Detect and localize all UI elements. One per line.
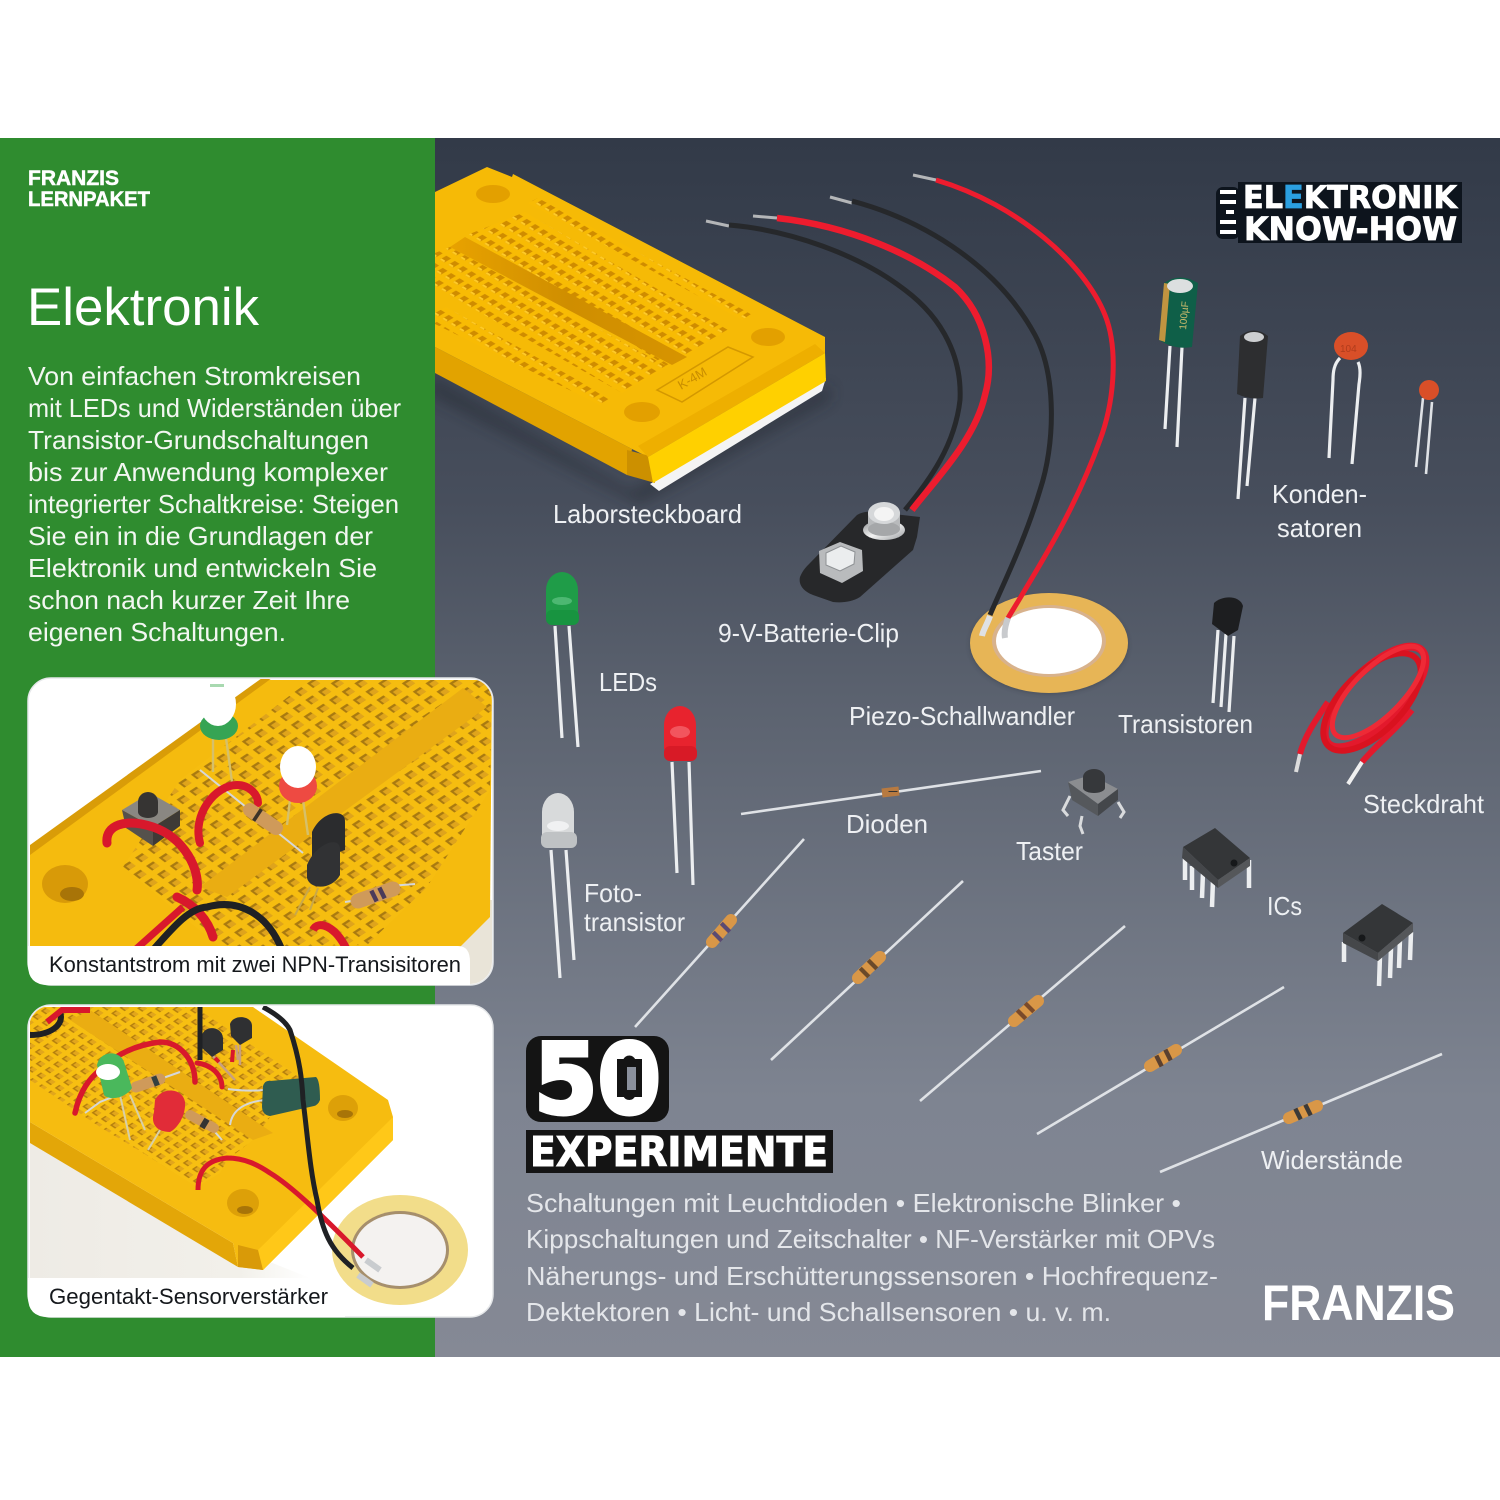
experiments list text: Schaltungen mit Leuchtdioden • Elektronische Blinker • — [526, 1188, 1181, 1218]
piezo transducer — [970, 593, 1128, 694]
intro paragraph: Elektronik und entwickeln Sie — [28, 553, 377, 583]
label: Dioden: Dioden — [846, 809, 928, 839]
intro paragraph: Transistor-Grundschaltungen — [28, 425, 369, 455]
phototransistor — [541, 793, 577, 978]
badge: 50: 50 — [534, 1023, 661, 1136]
photo panel: Gegentakt circuit — [28, 1005, 493, 1317]
label: Kondensatoren: Konden- — [1272, 479, 1367, 509]
grey main panel — [435, 138, 1500, 1357]
label: 9-V-Batterie-Clip: 9-V-Batterie-Clip — [718, 618, 899, 648]
capacitor: red disc: 104 — [1340, 344, 1357, 355]
label: Kondensatoren — [1272, 479, 1367, 543]
label: Fototransistor — [584, 878, 685, 937]
LED: green — [546, 572, 579, 747]
label: Transistoren: Transistoren — [1118, 709, 1253, 739]
brand: Franzis Lernpaket: FRANZIS — [28, 167, 119, 190]
heading: Elektronik: Elektronik — [27, 278, 259, 337]
label: Taster: Taster — [1016, 836, 1083, 866]
experiments list text: Kippschaltungen und Zeitschalter • NF-Verstärker mit OPVs — [526, 1224, 1215, 1254]
label: Widerstände: Widerstände — [1261, 1145, 1403, 1175]
caption: Konstantstrom: Konstantstrom mit zwei NPN-Transisitoren — [49, 952, 461, 977]
label: Fototransistor: transistor — [584, 907, 685, 937]
capacitor: green electrolytic — [1159, 278, 1198, 447]
jumper wire coil — [1296, 631, 1441, 784]
capacitor: green electrolytic: 100µF — [1178, 301, 1191, 330]
label: Laborsteckboard: Laborsteckboard — [553, 499, 742, 529]
resistor 1 — [635, 839, 804, 1027]
label: Piezo-Schallwandler: Piezo-Schallwandler — [849, 701, 1075, 731]
transistor — [1212, 597, 1243, 712]
intro paragraph: integrierter Schaltkreise: Steigen — [28, 489, 399, 519]
brand: Franzis Lernpaket: LERNPAKET — [28, 188, 150, 211]
label: ICs: ICs — [1267, 891, 1302, 921]
LED: red — [664, 706, 697, 885]
capacitor: red disc — [1329, 332, 1368, 464]
push button — [1063, 769, 1124, 834]
battery clip wires and piezo wires — [706, 175, 1113, 638]
intro paragraph: Sie ein in die Grundlagen der — [28, 521, 373, 551]
IC chip 1 — [1182, 828, 1250, 907]
resistor 5 — [1160, 1054, 1442, 1172]
logo: Elektronik Know-How: ELEKTRONIK — [1243, 180, 1458, 216]
9V battery clip — [800, 502, 920, 602]
intro paragraph: Von einfachen Stromkreisen — [28, 361, 361, 391]
brand: Franzis logo: FRANZIS — [1262, 1275, 1455, 1331]
intro paragraph — [28, 361, 401, 647]
capacitor: black electrolytic — [1237, 330, 1268, 499]
photo panel: Konstantstrom circuit — [28, 678, 500, 990]
experiments list text: Dektektoren • Licht- und Schallsensoren • u. v. m. — [526, 1297, 1111, 1327]
label: Kondensatoren: satoren — [1277, 513, 1362, 543]
IC chip 2 — [1343, 904, 1413, 986]
breadboard — [430, 167, 830, 505]
intro paragraph: mit LEDs und Widerständen über — [28, 393, 401, 423]
label: Fototransistor: Foto- — [584, 878, 642, 908]
caption: Konstantstrom — [28, 946, 470, 985]
experiments list text — [526, 1188, 1218, 1327]
resistor 3 — [920, 926, 1125, 1101]
green sidebar panel — [0, 138, 435, 1357]
intro paragraph: eigenen Schaltungen. — [28, 617, 286, 647]
resistor 2 — [771, 881, 963, 1060]
diode — [741, 771, 1041, 814]
caption: Gegentakt — [28, 1278, 345, 1317]
breadboard: K-4M — [675, 364, 709, 393]
logo: Elektronik Know-How: KNOW-HOW — [1244, 210, 1457, 248]
resistor 4 — [1037, 987, 1284, 1134]
badge: Experimente: EXPERIMENTE — [530, 1128, 828, 1176]
logo: Elektronik Know-How — [1216, 180, 1462, 248]
intro paragraph: bis zur Anwendung komplexer — [28, 457, 388, 487]
capacitor: small red disc — [1416, 380, 1439, 474]
intro paragraph: schon nach kurzer Zeit Ihre — [28, 585, 350, 615]
label: Steckdraht: Steckdraht — [1363, 789, 1485, 819]
label: LEDs: LEDs — [599, 667, 657, 697]
experiments list text: Näherungs- und Erschütterungssensoren • Hochfrequenz- — [526, 1261, 1218, 1291]
caption: Gegentakt: Gegentakt-Sensorverstärker — [49, 1284, 328, 1309]
brand: Franzis Lernpaket — [28, 167, 150, 211]
